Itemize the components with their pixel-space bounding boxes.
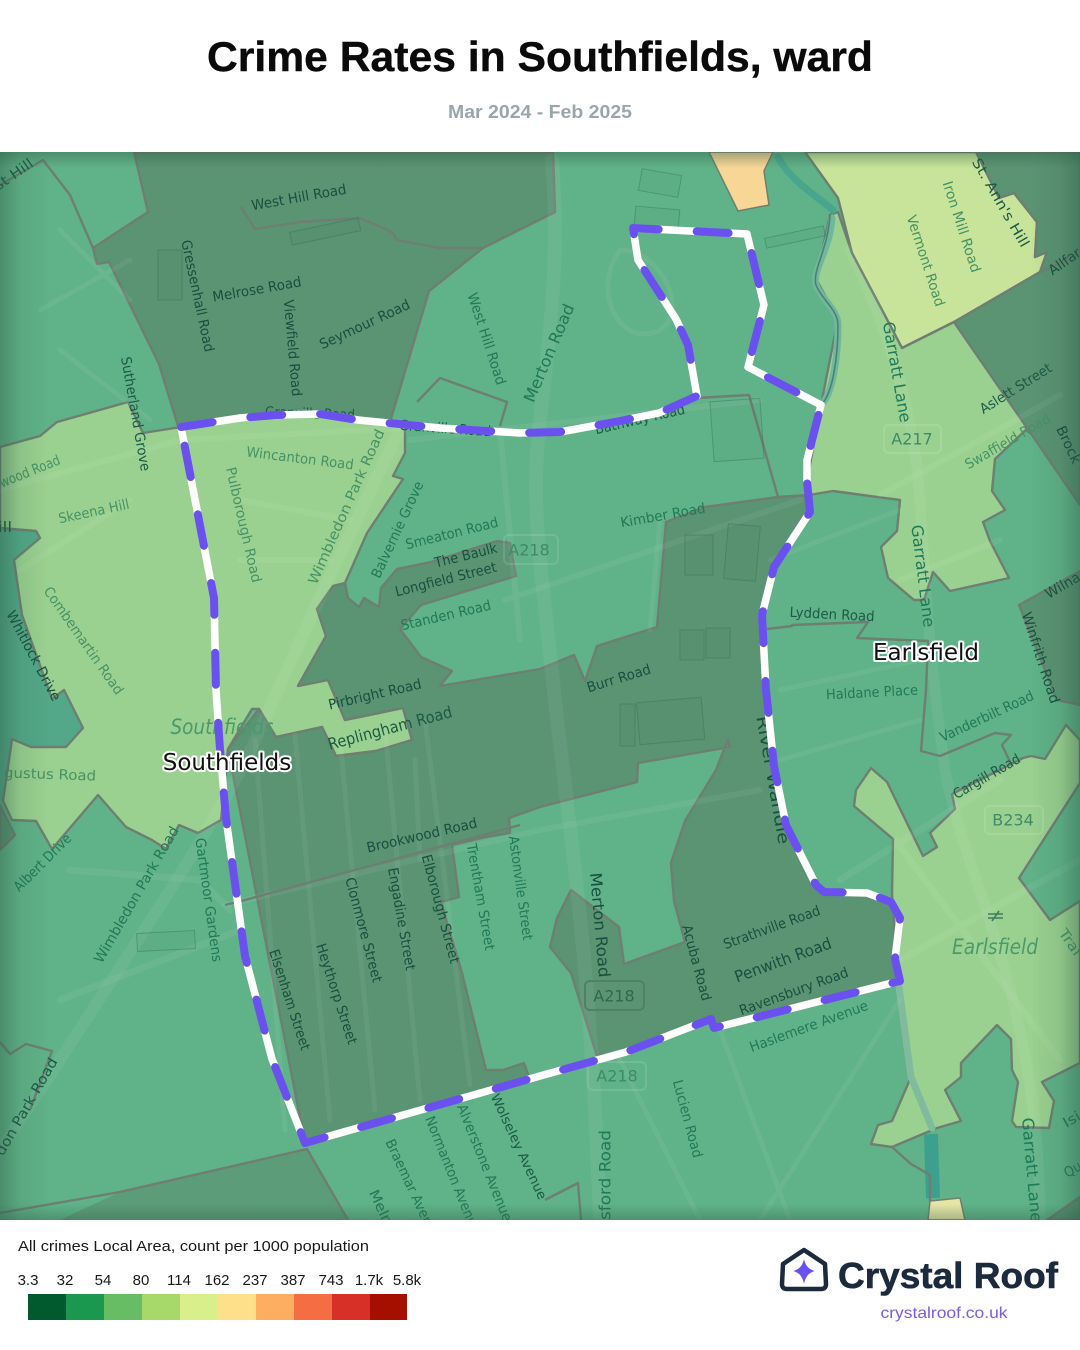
road shield A218 south (588, 1062, 646, 1090)
area: west low band around Southfields (0, 402, 412, 849)
street labels: River Wandle (752, 714, 794, 846)
street labels: Sutherland Grove (117, 355, 153, 473)
building footprints (137, 169, 825, 952)
road shield A218 centre (585, 981, 644, 1010)
legend scale labels: 237 (242, 1272, 268, 1289)
street labels: Skeena Hill (57, 497, 131, 527)
street labels: Whitlock Drive (2, 608, 64, 704)
icon: rail station (988, 911, 1003, 921)
street labels: Haslemere Avenue (748, 998, 870, 1056)
road network (0, 160, 1080, 1220)
road shield A218 north (504, 535, 558, 564)
street labels: Balvernie Grove (369, 479, 427, 581)
street labels: Wolseley Avenue (487, 1092, 549, 1202)
area: St Ann's Hill high band (976, 152, 1080, 272)
icon: Crystal Roof house logo (782, 1250, 826, 1289)
area: north-west high band (93, 152, 555, 426)
street labels: sford Road (596, 1130, 614, 1220)
street labels: Penwith Road (732, 934, 834, 986)
legend scale labels: 1.7k (355, 1272, 384, 1289)
street labels: Clonmore Street (341, 876, 385, 985)
internal boundary lines (0, 160, 1011, 1220)
place label: Southfields italic: Southfields (170, 715, 274, 739)
street labels: St. Ann's Hill (968, 156, 1032, 250)
area: bottom yellow tile (928, 1198, 965, 1220)
street labels: West Hill Road (250, 182, 348, 214)
legend scale labels: 743 (318, 1272, 344, 1289)
street labels: Brookwood Road (365, 815, 479, 857)
legend scale labels: 162 (204, 1272, 230, 1289)
street labels: Merton Road (586, 872, 614, 978)
boundary: south-west band top edge (0, 1149, 348, 1220)
street labels: West Hill Road (464, 291, 508, 387)
street labels: Wincanton Road (245, 444, 355, 474)
street labels: Astonville Street (505, 835, 535, 942)
area: top orange tile (709, 152, 773, 211)
legend scale labels (18, 1272, 422, 1289)
road shield A218 centre: A218 (593, 986, 635, 1006)
legend and logo footer (18, 1238, 1059, 1322)
road shield A217 (884, 425, 941, 453)
street labels: Gressenhall Road (177, 239, 217, 353)
street labels: Standen Road (399, 598, 493, 634)
legend scale labels: 387 (280, 1272, 306, 1289)
street labels: Engadine Street (384, 866, 418, 972)
legend scale labels: 5.8k (393, 1272, 422, 1289)
logo website link: crystalroof.co.uk (880, 1305, 1009, 1322)
street labels: Vermont Road (903, 213, 947, 309)
street labels: Gartmoor Gardens (191, 837, 225, 963)
street labels: Heythorp Street (312, 942, 360, 1047)
area: Winfrith Road high band (1019, 571, 1080, 705)
road shield B234: B234 (992, 810, 1034, 830)
date range subtitle: Mar 2024 - Feb 2025 (448, 102, 632, 122)
area: Whitlock Drive teal band (0, 528, 83, 801)
road shield A218 south: A218 (596, 1066, 638, 1086)
legend scale labels: 32 (57, 1272, 73, 1289)
area: south-east corner high band (1047, 1197, 1080, 1220)
street labels: Trentham Street (463, 841, 497, 952)
street labels: Replingham Road (326, 702, 454, 754)
legend colour ramp (28, 1294, 407, 1320)
street labels: Elsenham Street (265, 948, 313, 1053)
street labels: Kimber Road (619, 501, 707, 531)
street labels: Pulborough Road (222, 466, 264, 584)
street labels: Burr Road (585, 662, 653, 696)
street labels: Acuba Road (678, 923, 714, 1003)
street labels: Elborough Street (418, 853, 462, 966)
street labels: Winfrith Road (1018, 610, 1062, 706)
legend scale labels: 54 (95, 1272, 111, 1289)
street labels: Albert Drive (11, 831, 75, 895)
place label: Earlsfield italic: Earlsfield (952, 935, 1039, 959)
street labels: Wimbledon Park Road (306, 427, 388, 587)
street labels: Vanderbilt Road (937, 688, 1037, 746)
area: top right lowest band (805, 152, 1047, 348)
street labels: Haldane Place (826, 683, 918, 703)
street labels: Garratt Lane (1018, 1117, 1046, 1220)
road shield B234 (985, 806, 1043, 834)
street labels: Merton Road (520, 301, 578, 405)
street labels: Melrose Road (211, 274, 303, 306)
street labels: Wimbledon Park Road (91, 824, 183, 966)
street labels: Viewfield Road (280, 299, 304, 397)
river Wandle (778, 157, 933, 1198)
area: Earlsfield station low band (854, 725, 1080, 1147)
street labels: Granville Road (265, 404, 355, 424)
place label: Southfields: Southfields (163, 750, 291, 776)
area: south-west high band (60, 1149, 348, 1220)
street labels: Granville Road (399, 418, 491, 440)
road shield A218 north: A218 (508, 540, 550, 560)
street labels: Seymour Road (317, 297, 413, 353)
street labels: Bathway Road (593, 402, 687, 438)
page header (207, 33, 873, 122)
street labels: Pirbright Road (327, 677, 423, 713)
street labels: Lucien Road (669, 1078, 705, 1160)
road shield A217: A217 (891, 430, 933, 448)
area: central high band inside the ward (228, 495, 900, 1143)
street labels: Swaffield Road (962, 411, 1054, 473)
street labels: Longfield Street (394, 560, 499, 600)
logo wordmark: Crystal Roof (838, 1255, 1059, 1296)
street labels: Smeaton Road (404, 515, 500, 553)
legend title: All crimes Local Area, count per 1000 population (18, 1238, 369, 1255)
street labels: Combemartin Road (40, 584, 126, 698)
ward boundary (181, 228, 900, 1143)
area: Aslett Street high band (954, 253, 1080, 505)
choropleth map (0, 152, 1080, 1220)
map edge vignette (0, 152, 1080, 1220)
area: Garratt Lane low band (807, 212, 1030, 600)
legend scale labels: 80 (133, 1272, 149, 1289)
street labels: Cargill Road (951, 751, 1023, 803)
street labels: Aslett Street (977, 360, 1055, 418)
street labels: Iron Mill Road (939, 179, 983, 275)
street labels: The Baulk (432, 540, 500, 572)
street labels: Garratt Lane (879, 320, 915, 424)
area: west edge high wedge (0, 805, 15, 850)
street labels: Ravensbury Road (737, 965, 851, 1019)
street labels: Strathville Road (721, 903, 823, 953)
street labels: Garratt Lane (907, 524, 939, 628)
place label: Earlsfield: Earlsfield (873, 640, 979, 666)
street labels: gustus Road (4, 765, 96, 785)
map base area (0, 152, 1080, 1220)
title: Crime Rates in Southfields, ward (207, 33, 873, 80)
street labels: Lydden Road (789, 605, 875, 625)
legend scale labels: 3.3 (18, 1272, 38, 1289)
legend scale labels: 114 (167, 1272, 191, 1289)
